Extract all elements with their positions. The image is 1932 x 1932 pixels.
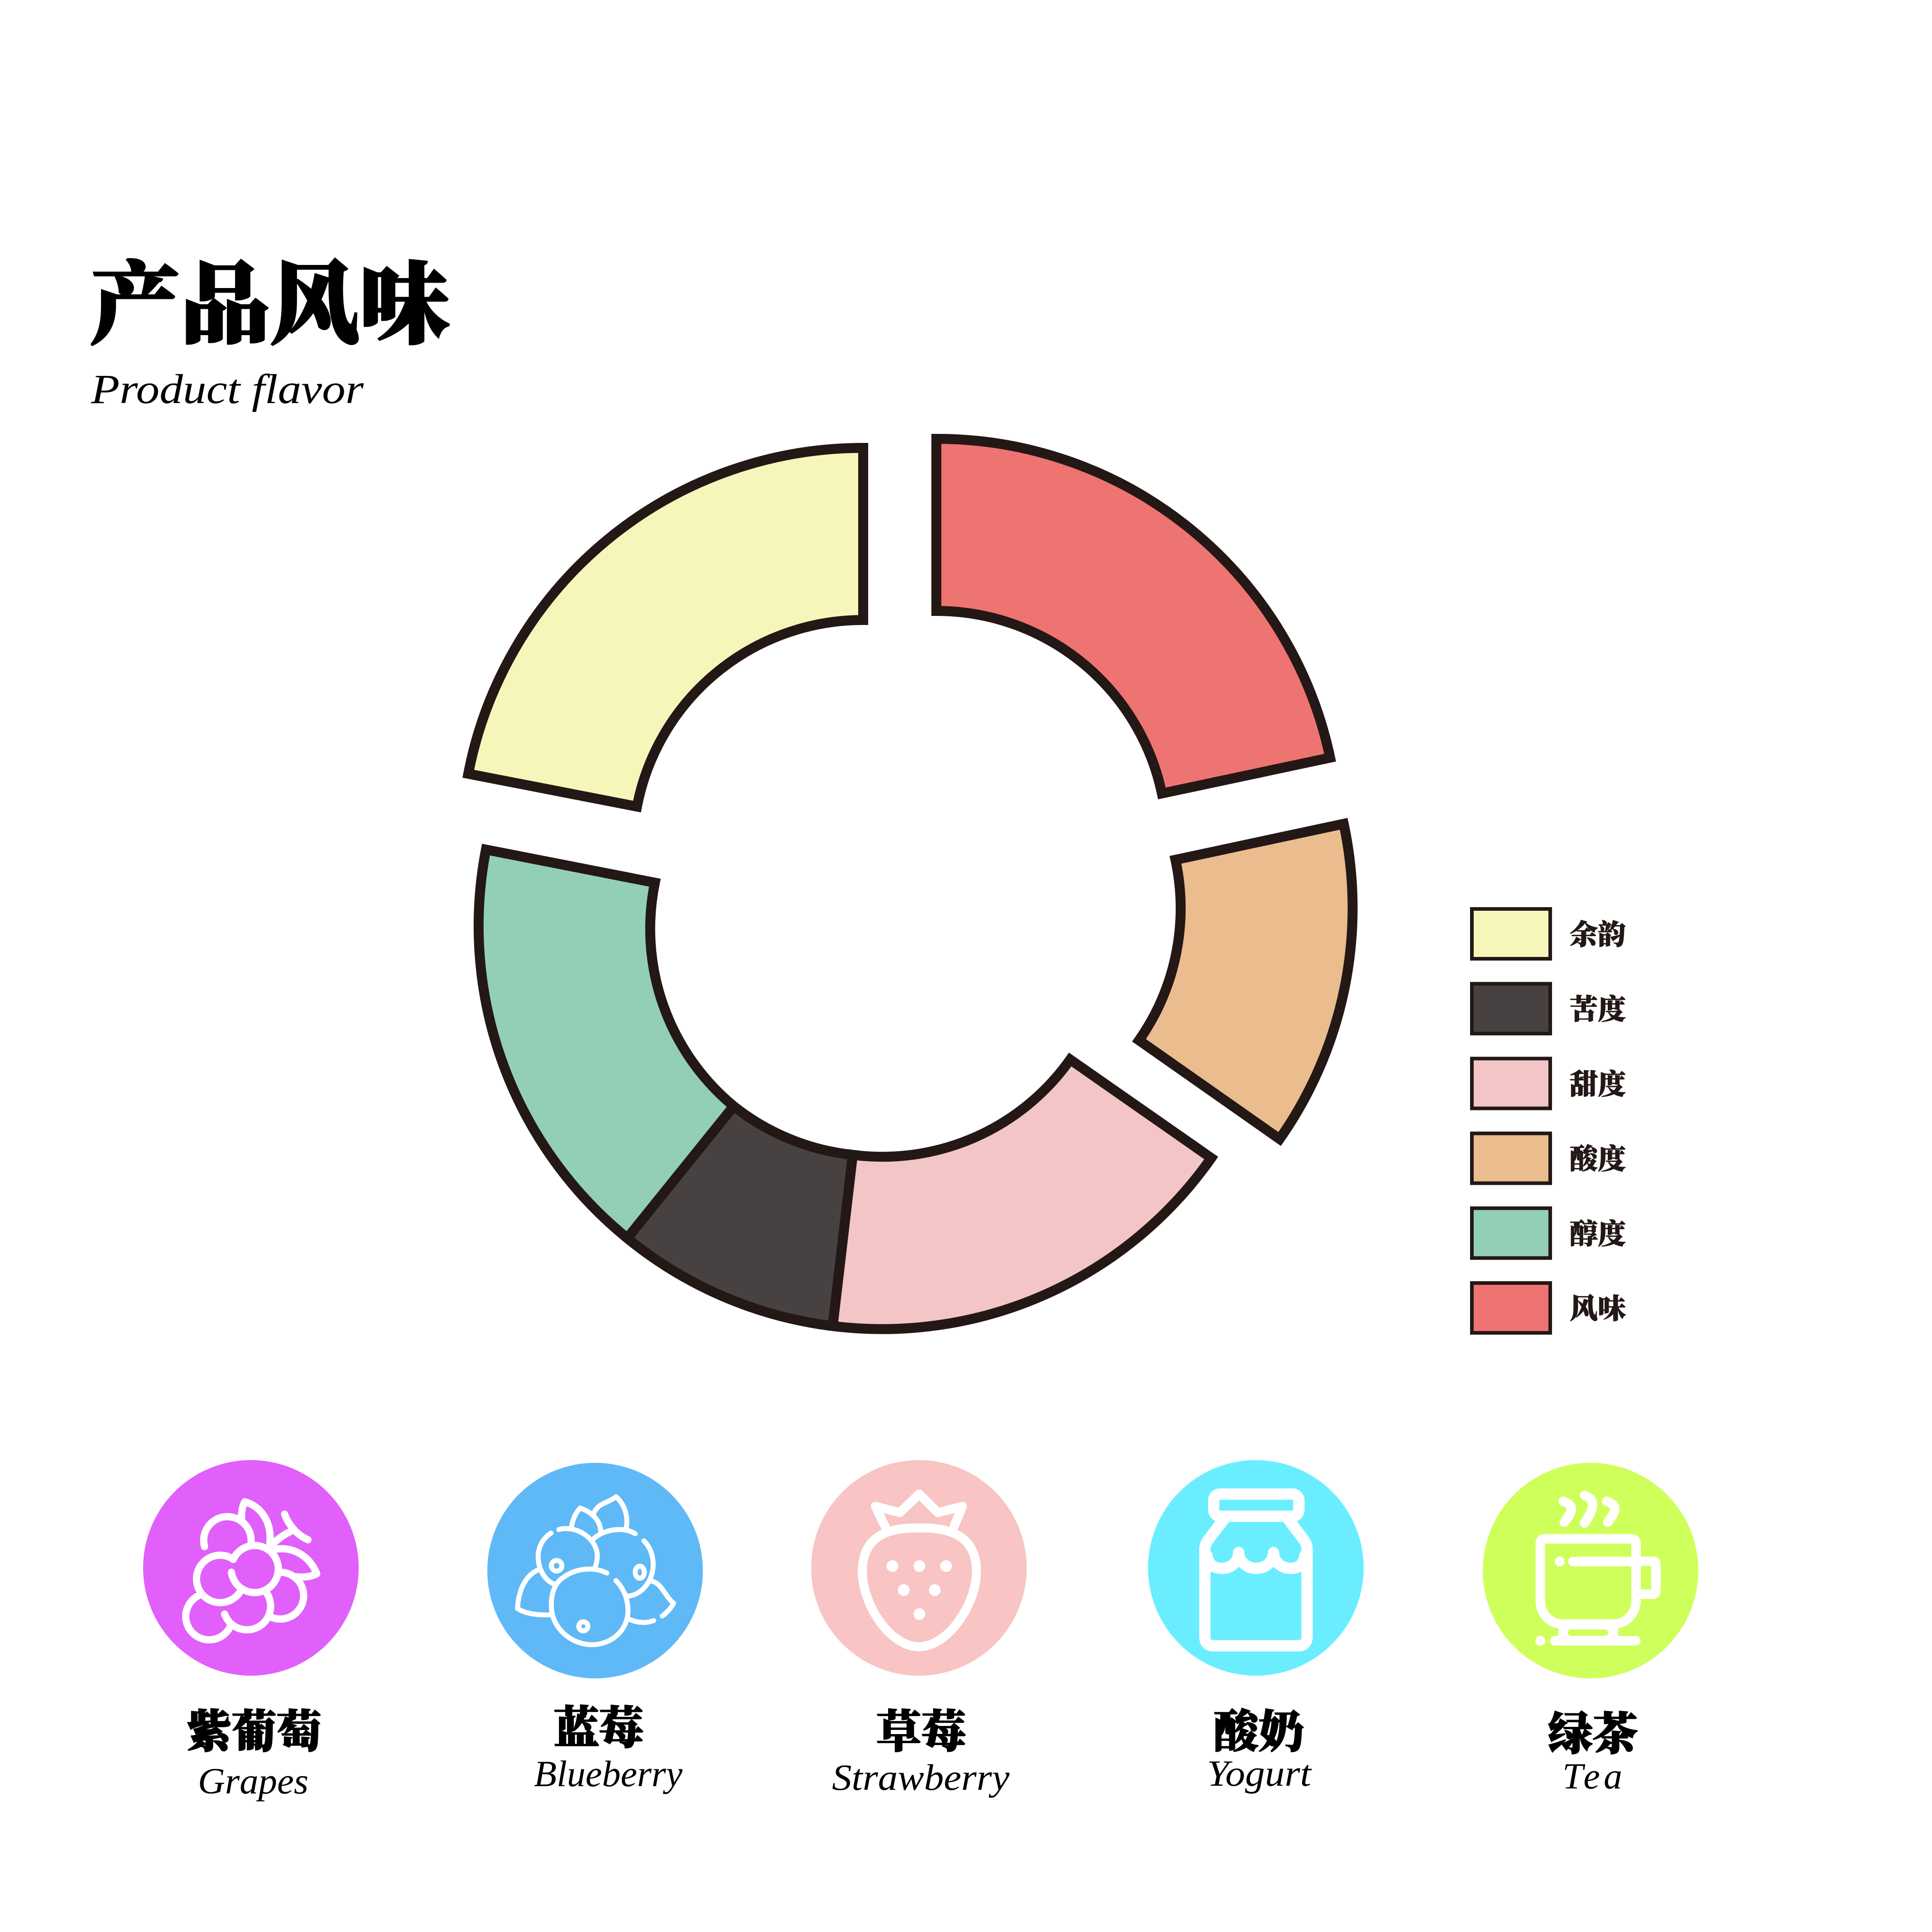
legend swatch: 甜度	[1472, 1058, 1550, 1108]
legend label: 余韵: 余韵	[1570, 919, 1626, 951]
label: 绿茶: 绿茶	[1548, 1710, 1638, 1759]
legend swatch: 风味	[1472, 1283, 1550, 1333]
legend swatch: 余韵	[1472, 909, 1550, 959]
label: Grapes: Grapes	[198, 1760, 308, 1802]
donut chart	[468, 439, 1353, 1329]
legend label: 甜度: 甜度	[1570, 1068, 1626, 1100]
label: 酸奶: 酸奶	[1214, 1708, 1303, 1757]
segment: 苦度 dark	[627, 1106, 853, 1326]
label: Blueberry: Blueberry	[534, 1753, 683, 1794]
legend label: 苦度: 苦度	[1570, 994, 1626, 1025]
legend swatch: 苦度	[1472, 984, 1550, 1033]
label: Strawberry: Strawberry	[832, 1757, 1010, 1798]
label: Tea: Tea	[1562, 1755, 1622, 1797]
segment: 风味 red	[937, 439, 1330, 793]
label: 紫葡萄: 紫葡萄	[187, 1708, 322, 1757]
label: 草莓: 草莓	[876, 1708, 966, 1757]
legend label: 风味: 风味	[1570, 1293, 1626, 1325]
legend label: 酸度: 酸度	[1570, 1144, 1626, 1175]
icon: blueberry	[487, 1463, 703, 1678]
legend	[1472, 909, 1626, 1333]
label: Yogurt: Yogurt	[1207, 1753, 1312, 1794]
icon: yogurt bottle	[1148, 1460, 1364, 1676]
legend swatch: 醇度	[1472, 1208, 1550, 1258]
icon: strawberry	[811, 1460, 1027, 1676]
segment: 余韵 yellow	[468, 448, 863, 807]
segment: 酸度 orange	[1139, 824, 1353, 1139]
icon: tea cup	[1483, 1463, 1698, 1678]
legend label: 醇度: 醇度	[1570, 1218, 1626, 1250]
title: 产品风味	[91, 256, 449, 356]
icon: grapes	[143, 1460, 359, 1676]
subtitle: Product flavor	[91, 366, 364, 412]
legend swatch: 酸度	[1472, 1134, 1550, 1183]
label: 蓝莓: 蓝莓	[554, 1704, 644, 1754]
segment: 甜度 pink	[833, 1060, 1211, 1329]
segment: 醇度 green	[479, 850, 734, 1238]
